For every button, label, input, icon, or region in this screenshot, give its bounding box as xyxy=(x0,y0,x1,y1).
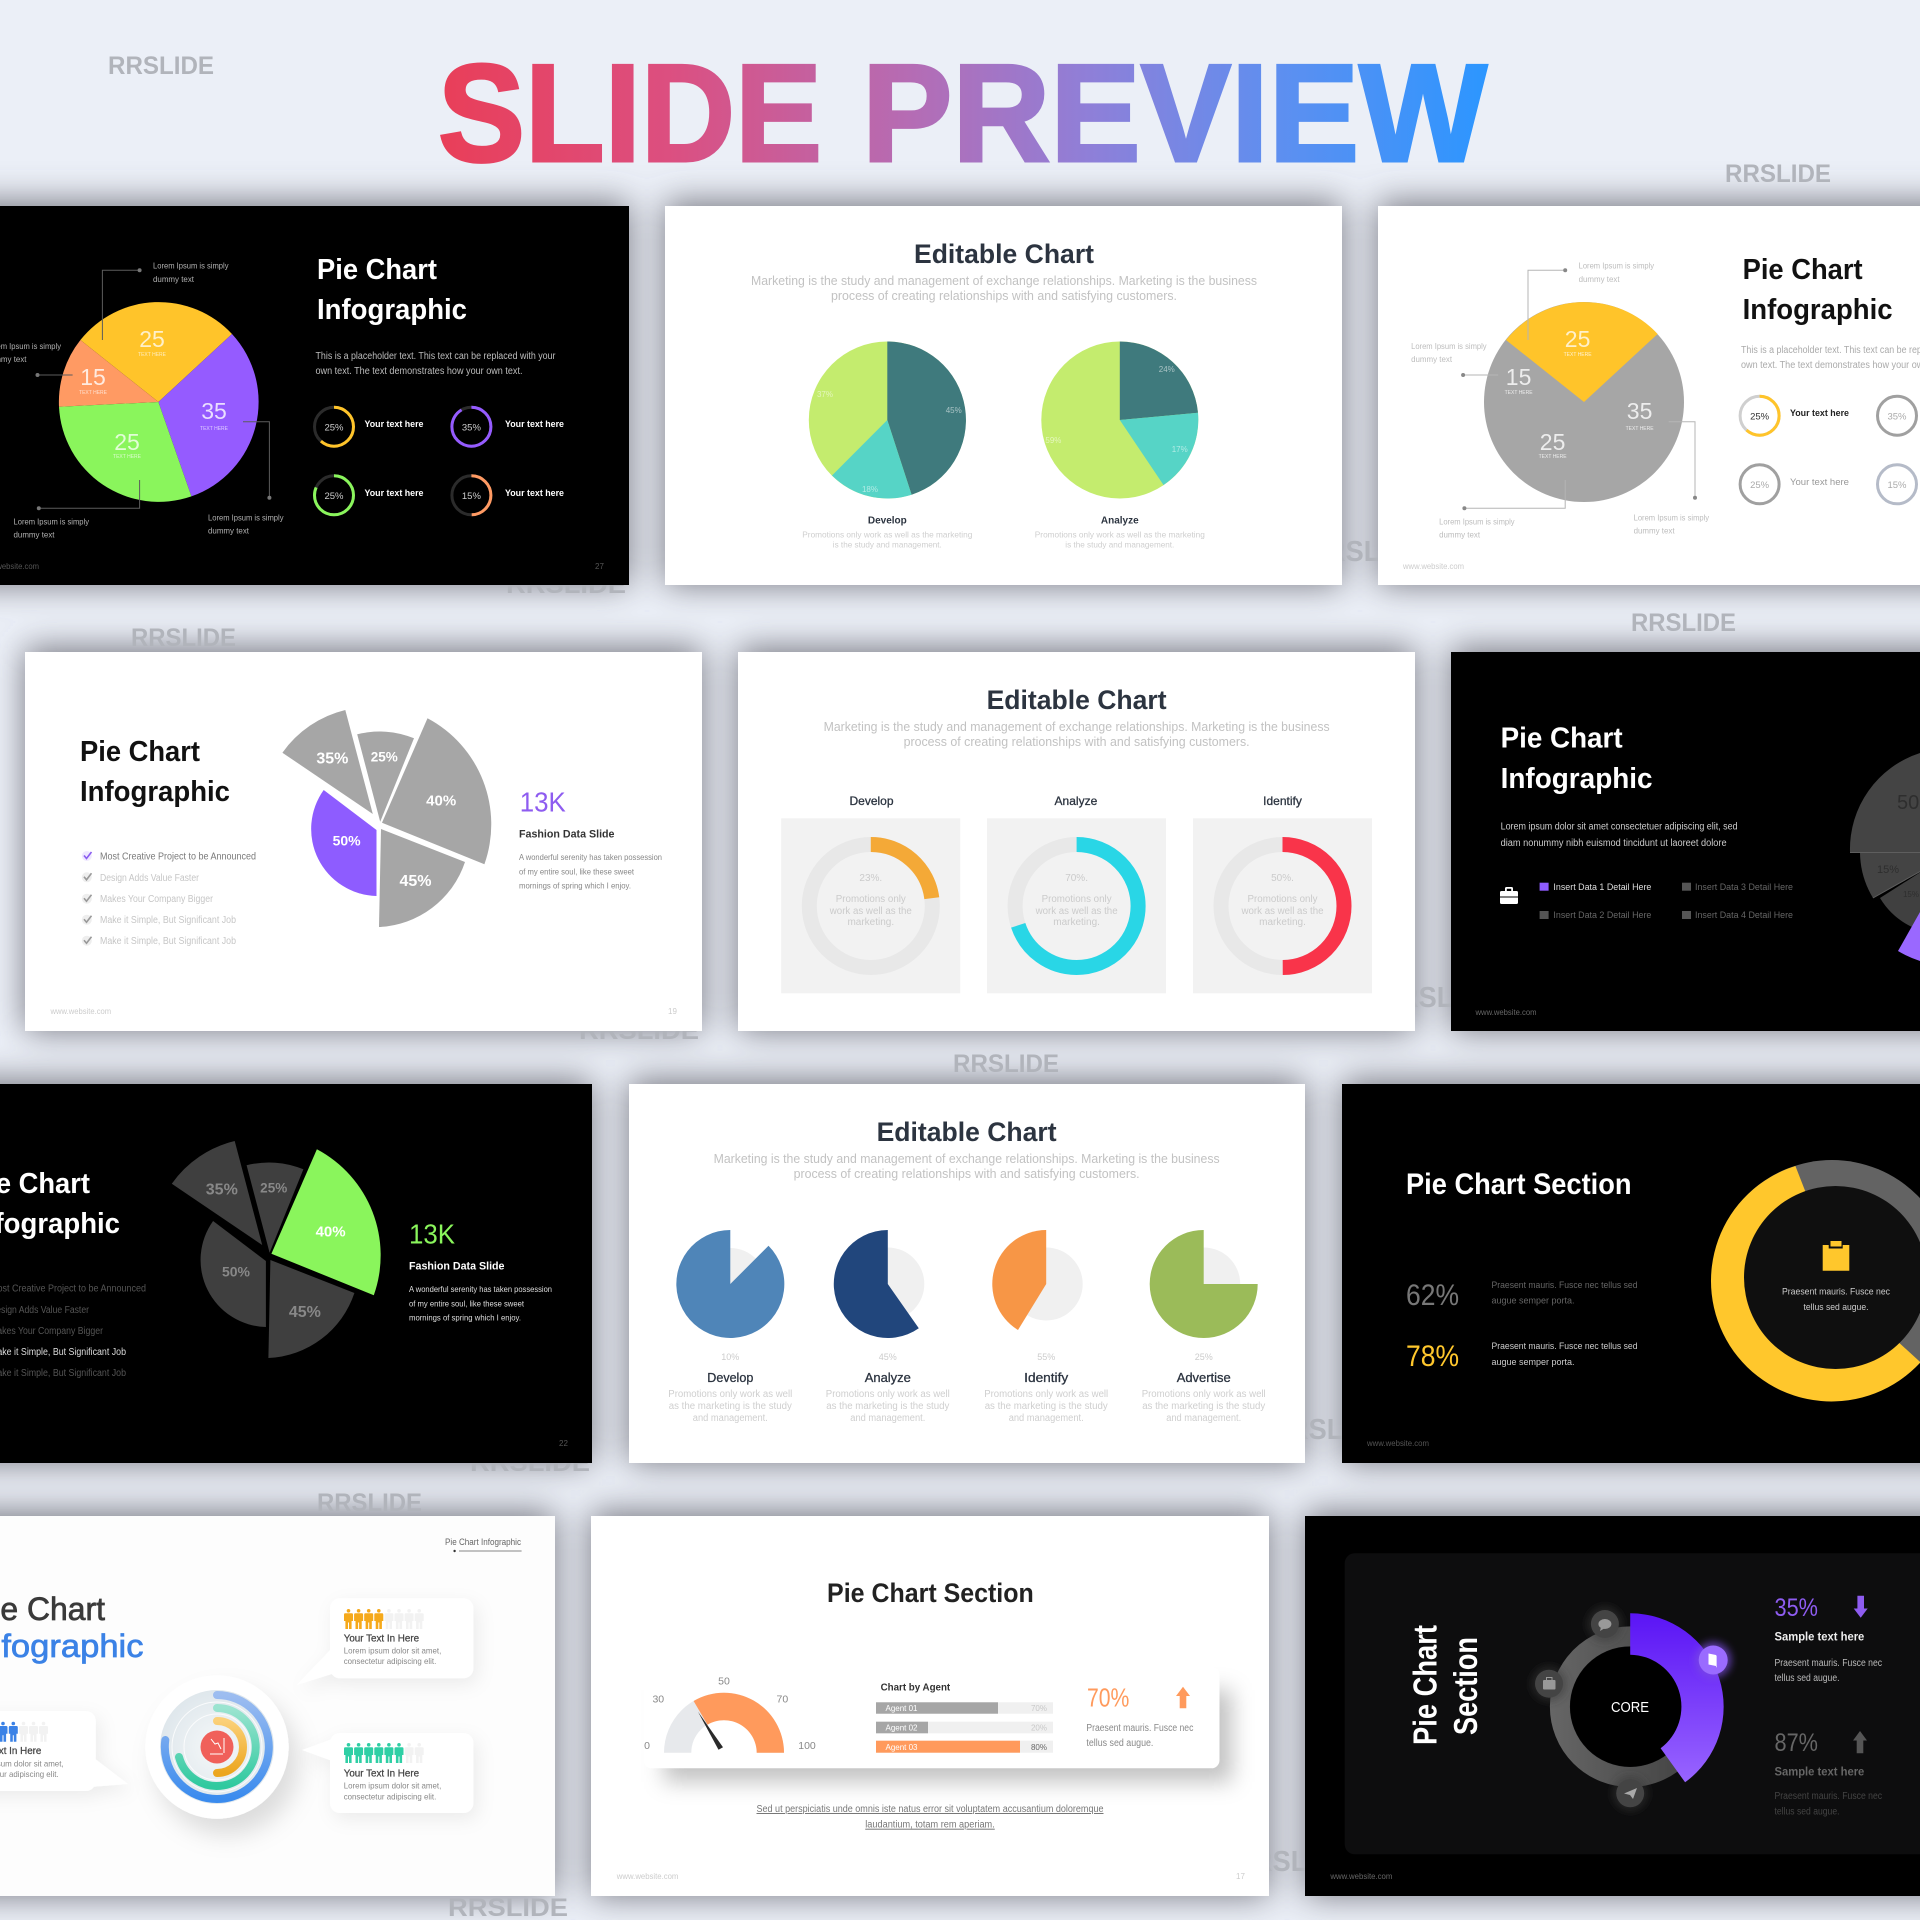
underlined note: Sed ut perspiciatis unde omnis iste natus error sit voluptatem accusantium doloremque xyxy=(756,1804,1104,1815)
pie: advertise: as the marketing is the study xyxy=(1142,1401,1265,1412)
title: SLIDE PREVIEW: PREVIEW xyxy=(862,36,1488,191)
text block: of my entire soul, like these sweet xyxy=(409,1298,525,1308)
callout: yellow people: Lorem ipsum dolor sit amet, xyxy=(344,1646,441,1656)
pie: develop xyxy=(668,1230,792,1424)
pie captions: Analyze xyxy=(1101,516,1139,526)
pie chart: grey with yellow slice: dummy text xyxy=(1634,526,1675,536)
stat: 87%: Sample text here xyxy=(1774,1765,1865,1779)
callout: yellow people xyxy=(297,1598,473,1685)
footer: 27 xyxy=(595,562,604,571)
progress rings: Your text here xyxy=(1790,408,1849,418)
callout: teal people: Lorem ipsum dolor sit amet, xyxy=(344,1781,441,1791)
arrow: up xyxy=(1176,1687,1190,1708)
RRSLIDE watermarks: RRSLIDE xyxy=(1379,982,1499,1014)
heading: Editable Chart xyxy=(877,1117,1057,1147)
column labels: Identify xyxy=(1263,794,1302,808)
footer: www.website.com xyxy=(1402,562,1464,571)
pie chart: four colour slices xyxy=(59,302,259,502)
pie: analyze: as the marketing is the study xyxy=(826,1401,949,1412)
footer xyxy=(616,1872,1245,1881)
pie chart: grey with yellow slice: 15 xyxy=(1506,364,1531,390)
pie: identify: 55% xyxy=(1037,1352,1055,1362)
exploded pie chart: 50% xyxy=(222,1264,251,1280)
donut card: identify: work as well as the xyxy=(1241,906,1324,917)
panel: slide 8 editable chart four pies xyxy=(629,1084,1305,1463)
legend xyxy=(1540,882,1793,920)
progress rings: 35% xyxy=(1887,412,1907,422)
leader lines and labels xyxy=(0,260,284,540)
footer: www.website.com xyxy=(50,1007,111,1016)
panel: slide 5 editable chart three donuts xyxy=(738,652,1415,1031)
heading: Editable Chart xyxy=(914,239,1094,269)
pie chart: develop: 18% xyxy=(862,485,878,494)
stat: 87%: tellus sed augue. xyxy=(1774,1806,1840,1818)
donut chart: Praesent mauris. Fusce nec xyxy=(1782,1286,1890,1298)
legend: Insert Data 3 Detail Here xyxy=(1695,882,1793,892)
text block: Praesent mauris. Fusce nec xyxy=(1086,1723,1193,1734)
leader lines and labels: Lorem Ipsum is simply xyxy=(208,512,284,522)
pie: develop: and management. xyxy=(693,1413,768,1424)
donut card: identify: 50%. xyxy=(1271,873,1294,884)
footer: 19 xyxy=(668,1007,677,1016)
stat: 35% xyxy=(1774,1594,1882,1684)
stat: 62%: Praesent mauris. Fusce nec tellus sed xyxy=(1492,1280,1638,1291)
RRSLIDE watermarks: RRSLIDE xyxy=(1725,160,1831,188)
stat: 78%: Praesent mauris. Fusce nec tellus sed xyxy=(1492,1341,1638,1352)
pie: advertise: Promotions only work as well xyxy=(1142,1389,1266,1400)
subtitle xyxy=(824,719,1330,749)
stat: 62%: 62% xyxy=(1406,1279,1459,1312)
stat: 87%: Praesent mauris. Fusce nec xyxy=(1774,1791,1882,1802)
bar chart: chart by agent: 20% xyxy=(1031,1724,1047,1732)
text block: Fashion Data Slide xyxy=(519,828,614,840)
heading: Infographic xyxy=(80,776,230,808)
RRSLIDE watermarks: RRSLIDE xyxy=(1631,609,1736,637)
heading: Infographic xyxy=(1501,763,1653,795)
pie: develop: as the marketing is the study xyxy=(669,1401,792,1412)
pie chart: grey with yellow slice: TEXT HERE xyxy=(1564,352,1592,358)
pie chart: grey with yellow slice: 25 xyxy=(1540,429,1565,455)
progress rings: 15% xyxy=(462,491,481,502)
heading: Infographic xyxy=(1743,294,1893,326)
callout: yellow people: consectetur adipiscing elit. xyxy=(344,1656,436,1666)
exploded pie chart cropped at edge: 15% xyxy=(1877,864,1899,876)
subtitle: process of creating relationships with and satisfying customers. xyxy=(831,288,1177,303)
RRSLIDE watermarks: RRSLIDE xyxy=(1269,1414,1389,1446)
donut card: identify: Promotions only xyxy=(1248,894,1318,905)
progress rings: 35% xyxy=(462,422,481,434)
pie chart: grey with yellow slice: Lorem Ipsum is simply xyxy=(1579,260,1655,270)
pie chart: four colour slices: 35 xyxy=(201,398,227,424)
check list: Make it Simple, But Significant Job xyxy=(100,936,236,947)
column labels xyxy=(849,794,1302,808)
pie: identify: and management. xyxy=(1009,1413,1084,1424)
stat: 78%: augue semper porta. xyxy=(1492,1357,1574,1368)
exploded pie chart: 50% xyxy=(333,832,361,848)
donut chart: CORE xyxy=(1611,1699,1649,1716)
pie chart: four colour slices: 15 xyxy=(80,364,106,390)
pie chart: four colour slices: TEXT HERE xyxy=(79,390,108,396)
text block: mornings of spring which I enjoy. xyxy=(519,880,631,890)
donut card: develop xyxy=(781,818,960,993)
panel: slide 7 exploded pie dark xyxy=(0,1084,592,1463)
pie chart: four colour slices: TEXT HERE xyxy=(138,352,167,358)
legend: Insert Data 1 Detail Here xyxy=(1553,882,1651,892)
progress rings: 25% xyxy=(1750,480,1770,491)
callout: blue people xyxy=(0,1711,128,1791)
stat: 78% xyxy=(1406,1340,1638,1373)
progress rings: 25% xyxy=(324,491,344,502)
panel: slide 9 dark donut section xyxy=(1342,1084,1920,1463)
heading: Pie Chart xyxy=(317,254,437,286)
text block: Lorem ipsum dolor sit amet consectetuer adipiscing elit, sed xyxy=(1501,822,1738,832)
footer: www.website.com xyxy=(1329,1872,1393,1881)
text block: This is a placeholder text. This text can be replaced with your xyxy=(316,351,556,362)
icon: briefcase xyxy=(1531,1666,1567,1702)
pie captions: is the study and management. xyxy=(833,540,942,550)
pie chart: analyze: 24% xyxy=(1159,365,1175,374)
pie: identify xyxy=(984,1230,1108,1424)
donut card: identify: marketing. xyxy=(1259,917,1306,928)
text block: diam nonummy nibh euismod tincidunt ut laoreet dolore xyxy=(1501,838,1727,849)
donut card: develop: work as well as the xyxy=(829,906,912,917)
callout: yellow people: Your Text In Here xyxy=(344,1634,420,1645)
RRSLIDE watermarks: RRSLIDE xyxy=(1233,1846,1353,1878)
inner card xyxy=(1345,1553,1920,1854)
text block: A wonderful serenity has taken possession xyxy=(409,1284,552,1294)
stat: 35%: tellus sed augue. xyxy=(1774,1673,1840,1684)
pie chart: four colour slices: TEXT HERE xyxy=(200,426,229,432)
bar chart: chart by agent: Chart by Agent xyxy=(881,1682,951,1694)
pie chart: grey with yellow slice: Lorem Ipsum is simply xyxy=(1634,512,1710,522)
exploded pie chart: 35% xyxy=(206,1182,238,1198)
footer xyxy=(0,562,604,571)
text block xyxy=(316,351,556,377)
leader lines and labels: Lorem Ipsum is simply xyxy=(153,260,229,270)
check list: Make it Simple, But Significant Job xyxy=(100,915,236,926)
gauge chart: 30 xyxy=(652,1694,664,1706)
footer xyxy=(50,1007,677,1016)
pie: advertise: Advertise xyxy=(1177,1370,1231,1385)
donut chart xyxy=(1711,1160,1920,1401)
pie chart: grey with yellow slice: dummy text xyxy=(1411,354,1453,364)
donut card: develop: marketing. xyxy=(847,917,894,928)
RRSLIDE watermarks: RRSLIDE xyxy=(506,571,626,599)
bar chart: chart by agent: Agent 03 xyxy=(886,1742,918,1752)
panel: slide 3 light pie chart infographic xyxy=(1378,206,1920,585)
bar chart: chart by agent: 80% xyxy=(1031,1743,1047,1752)
panel: slide 11 gauge and agent bars xyxy=(591,1516,1269,1896)
text block xyxy=(409,1260,552,1322)
heading: Pie Chart xyxy=(80,736,200,768)
panel: slide 1 dark pie chart infographic xyxy=(0,206,629,585)
exploded pie chart xyxy=(282,710,491,927)
subtitle xyxy=(714,1151,1220,1181)
progress rings: Your text here xyxy=(364,419,424,429)
progress rings xyxy=(1740,396,1916,504)
title: SLIDE PREVIEW: SLIDE xyxy=(438,36,822,191)
progress rings: 15% xyxy=(1887,480,1907,491)
progress rings xyxy=(314,407,564,515)
pie: analyze: Promotions only work as well xyxy=(826,1389,950,1400)
gauge chart: 0 xyxy=(644,1740,650,1752)
progress rings: Your text here xyxy=(1790,477,1849,487)
donut card: analyze: marketing. xyxy=(1053,917,1100,928)
text block xyxy=(1741,345,1920,371)
progress rings: Your text here xyxy=(505,488,564,498)
pie: identify: Promotions only work as well xyxy=(984,1389,1108,1400)
heading xyxy=(317,254,467,326)
progress rings: Your text here xyxy=(505,419,564,429)
pie chart: analyze: 59% xyxy=(1045,436,1061,445)
text block xyxy=(519,828,662,890)
RRSLIDE watermarks: RRSLIDE xyxy=(953,1050,1059,1078)
pie chart: grey with yellow slice: TEXT HERE xyxy=(1505,390,1533,396)
pie: identify: Identify xyxy=(1024,1370,1069,1385)
donut card: analyze: Promotions only xyxy=(1042,894,1112,905)
check list: Design Adds Value Faster xyxy=(100,873,200,884)
pie: analyze: Analyze xyxy=(865,1370,911,1385)
radial chart xyxy=(145,1675,289,1819)
exploded pie chart: 25% xyxy=(371,750,398,764)
stat: 62%: augue semper porta. xyxy=(1492,1296,1574,1306)
vertical heading xyxy=(1406,1625,1484,1745)
check list xyxy=(82,851,256,947)
icon: clipboard xyxy=(1823,1241,1849,1271)
icon: chart xyxy=(210,1738,224,1754)
pie chart: grey with yellow slice: Lorem Ipsum is simply xyxy=(1439,516,1515,526)
pie chart: analyze: 17% xyxy=(1172,445,1188,454)
pie captions: Develop xyxy=(868,516,907,526)
exploded pie chart: 45% xyxy=(289,1304,321,1321)
text block xyxy=(1501,822,1738,849)
pie chart: grey with yellow slice: dummy text xyxy=(1579,274,1620,284)
pie chart: develop: 37% xyxy=(817,390,833,399)
footer: www.website.com xyxy=(1475,1008,1537,1017)
leader lines and labels: Lorem Ipsum is simply xyxy=(14,516,90,526)
stat: 62% xyxy=(1406,1279,1638,1312)
heading: Infographic xyxy=(317,294,467,326)
heading xyxy=(0,1168,120,1240)
heading xyxy=(1743,254,1893,326)
donut chart: tellus sed augue. xyxy=(1804,1302,1868,1313)
panel: slide 2 editable chart two pies xyxy=(665,206,1342,585)
subtitle xyxy=(751,273,1257,303)
heading: Pie Chart Section xyxy=(827,1578,1034,1608)
heading xyxy=(0,1591,144,1664)
stat: 35%: Praesent mauris. Fusce nec xyxy=(1774,1658,1882,1669)
text block: Fashion Data Slide xyxy=(409,1260,504,1272)
text block: mornings of spring which I enjoy. xyxy=(409,1312,521,1322)
heading: Pie Chart xyxy=(1501,722,1623,754)
legend: Insert Data 4 Detail Here xyxy=(1695,910,1793,920)
stat: 35%: 35% xyxy=(1774,1594,1818,1622)
pie chart: grey with yellow slice: TEXT HERE xyxy=(1626,426,1654,432)
subtitle: process of creating relationships with and satisfying customers. xyxy=(794,1166,1140,1181)
pie captions: Promotions only work as well as the marketing xyxy=(1035,530,1205,540)
pie: advertise: and management. xyxy=(1166,1413,1241,1424)
exploded pie chart: 35% xyxy=(316,750,348,768)
underlined note: laudantium, totam rem aperiam. xyxy=(865,1820,995,1831)
text block: A wonderful serenity has taken possession xyxy=(519,852,662,862)
stat: 13K: 13K xyxy=(520,787,566,818)
pie chart: develop: 45% xyxy=(946,406,962,415)
bar chart: chart by agent: Agent 02 xyxy=(886,1722,918,1732)
RRSLIDE watermarks: RRSLIDE xyxy=(470,1449,590,1477)
gauge chart: 50 xyxy=(718,1676,730,1688)
donut card: develop: 23%. xyxy=(859,873,882,884)
legend: Insert Data 2 Detail Here xyxy=(1553,910,1651,920)
pie: advertise: 25% xyxy=(1195,1352,1213,1362)
callout: teal people: Your Text In Here xyxy=(344,1769,420,1780)
exploded pie chart xyxy=(172,1141,381,1358)
exploded pie chart cropped at edge: 15% xyxy=(1903,890,1919,899)
pie chart: grey with yellow slice: 25 xyxy=(1565,326,1590,352)
exploded pie chart cropped at edge: 50 xyxy=(1897,792,1919,814)
pie: analyze: and management. xyxy=(850,1413,925,1424)
pie: advertise xyxy=(1142,1230,1266,1424)
subtitle: process of creating relationships with and satisfying customers. xyxy=(904,734,1250,749)
pie chart: develop xyxy=(809,341,966,498)
donut card: analyze xyxy=(987,818,1166,993)
exploded pie chart: 25% xyxy=(260,1180,287,1196)
leader lines and labels: dummy text xyxy=(14,530,55,540)
pie chart: four colour slices: TEXT HERE xyxy=(113,454,142,460)
stat: 87%: 87% xyxy=(1774,1729,1818,1757)
breadcrumb xyxy=(445,1537,522,1552)
vertical heading: Pie Chart xyxy=(1406,1625,1443,1745)
title: SLIDE PREVIEW xyxy=(438,36,1488,191)
exploded pie chart: 45% xyxy=(399,873,432,890)
panel: slide 10 radial progress infographic xyxy=(0,1516,555,1896)
stat: 35%: Sample text here xyxy=(1774,1630,1865,1644)
underlined note xyxy=(756,1804,1104,1831)
bar chart: chart by agent: Agent 01 xyxy=(886,1703,918,1713)
donut chart xyxy=(1560,1613,1724,1782)
pie: develop: Develop xyxy=(707,1370,753,1385)
exploded pie chart: 40% xyxy=(316,1224,346,1240)
RRSLIDE watermarks: RRSLIDE xyxy=(317,1489,422,1517)
donut card: develop: Promotions only xyxy=(836,894,906,905)
text block: of my entire soul, like these sweet xyxy=(519,866,635,876)
bar chart: chart by agent: 70% xyxy=(1031,1704,1047,1713)
heading xyxy=(1501,722,1653,795)
pie chart: four colour slices: 25 xyxy=(114,429,140,455)
panel: slide 4 exploded pie light xyxy=(25,652,702,1031)
donut card: identify xyxy=(1193,818,1372,993)
footer: 17 xyxy=(1236,1872,1245,1881)
RRSLIDE watermarks: RRSLIDE xyxy=(131,624,236,652)
pie chart: grey with yellow slice: Lorem Ipsum is simply xyxy=(1411,341,1487,351)
donut card: analyze: work as well as the xyxy=(1035,906,1118,917)
pie chart: analyze xyxy=(1041,342,1198,498)
check list: Makes Your Company Bigger xyxy=(100,894,214,905)
check list: Most Creative Project to be Announced xyxy=(100,852,256,862)
card with offset shadow xyxy=(644,1667,1232,1782)
column labels: Develop xyxy=(849,794,894,808)
callout: teal people xyxy=(302,1733,473,1813)
progress rings: 25% xyxy=(324,422,344,434)
pie chart: grey with yellow slice: TEXT HERE xyxy=(1539,454,1567,460)
pie: develop: Promotions only work as well xyxy=(668,1389,792,1400)
subtitle: Marketing is the study and management of exchange relationships. Marketing is the business xyxy=(714,1151,1220,1166)
donut card: analyze: 70%. xyxy=(1065,873,1088,884)
heading: Editable Chart xyxy=(987,685,1167,715)
exploded pie chart cropped at edge xyxy=(1850,753,1920,961)
gauge chart: 100 xyxy=(798,1740,816,1752)
progress rings: Your text here xyxy=(364,488,424,498)
bar chart: chart by agent xyxy=(876,1682,1053,1753)
pie: develop: 10% xyxy=(721,1352,739,1362)
RRSLIDE watermarks: RRSLIDE xyxy=(1306,536,1426,568)
pie chart: grey with yellow slice: 35 xyxy=(1627,398,1652,424)
column labels: Analyze xyxy=(1055,794,1098,808)
footer: www.website.com xyxy=(1366,1439,1429,1448)
subtitle: Marketing is the study and management of exchange relationships. Marketing is the business xyxy=(751,273,1257,288)
icon: paper plane xyxy=(1612,1775,1648,1811)
pie captions: Promotions only work as well as the marketing xyxy=(802,530,973,540)
text block xyxy=(1086,1723,1193,1749)
panel: slide 12 dark core donut xyxy=(1305,1516,1920,1896)
stat: 78%: 78% xyxy=(1406,1340,1459,1373)
pie captions: is the study and management. xyxy=(1065,540,1174,550)
stat: 13K: 13K xyxy=(409,1219,455,1250)
vertical heading: Section xyxy=(1447,1637,1484,1735)
footer: www.website.com xyxy=(616,1872,679,1881)
panel: slide 6 dark pie infographic xyxy=(1451,652,1920,1031)
list xyxy=(0,1284,146,1379)
subtitle: Marketing is the study and management of exchange relationships. Marketing is the business xyxy=(824,719,1330,734)
gauge chart xyxy=(644,1676,816,1753)
progress rings: 25% xyxy=(1750,412,1770,422)
pie: analyze: 45% xyxy=(879,1352,897,1362)
footer: 22 xyxy=(559,1439,568,1448)
leader lines and labels: dummy text xyxy=(153,274,195,284)
stat: 87% xyxy=(1774,1729,1882,1818)
pie chart: four colour slices: 25 xyxy=(139,326,165,352)
stat: 70%: 70% xyxy=(1087,1683,1129,1713)
icon: book xyxy=(1695,1642,1731,1678)
pie: analyze xyxy=(826,1230,950,1424)
pie captions xyxy=(802,516,1205,550)
icon: chat xyxy=(1587,1606,1623,1642)
RRSLIDE watermarks: RRSLIDE xyxy=(108,52,214,80)
RRSLIDE watermarks: RRSLIDE xyxy=(579,1017,699,1045)
text block: own text. The text demonstrates how your own text. xyxy=(316,366,522,377)
heading: Pie Chart xyxy=(1743,254,1863,286)
heading xyxy=(80,736,230,808)
gauge chart: 70 xyxy=(777,1694,788,1706)
callout: teal people: consectetur adipiscing elit. xyxy=(344,1791,436,1801)
text block: tellus sed augue. xyxy=(1086,1738,1153,1749)
pie chart: grey with yellow slice xyxy=(1411,260,1710,540)
pie chart: grey with yellow slice: dummy text xyxy=(1439,530,1481,540)
leader lines and labels: dummy text xyxy=(208,526,250,536)
exploded pie chart: 40% xyxy=(426,792,456,810)
icon: briefcase xyxy=(1500,887,1518,904)
pie: identify: as the marketing is the study xyxy=(985,1401,1108,1412)
heading: Pie Chart Section xyxy=(1406,1168,1632,1201)
breadcrumb: Pie Chart Infographic xyxy=(445,1537,521,1547)
